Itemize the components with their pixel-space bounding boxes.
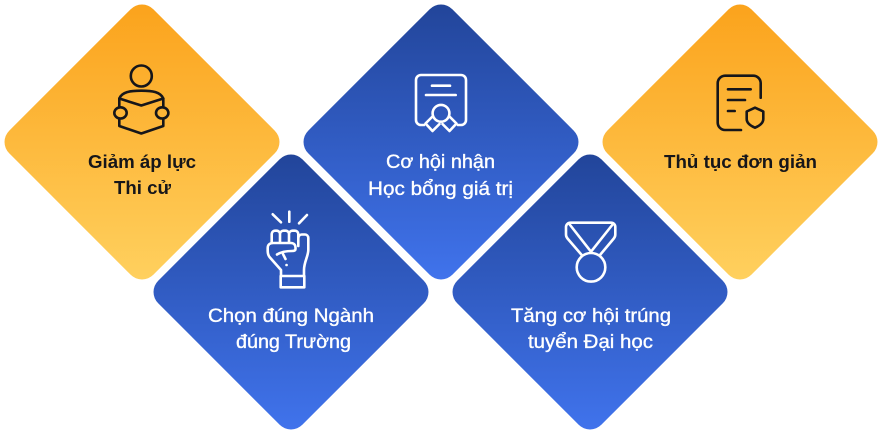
label bbox=[368, 151, 513, 200]
label: Tăng cơ hội trúng bbox=[511, 305, 671, 327]
label: Chọn đúng Ngành bbox=[208, 305, 374, 327]
panel: cơ hội nhận học bổng giá trị bbox=[304, 5, 578, 279]
icon: raised fist bbox=[268, 212, 308, 287]
icon: person reading book bbox=[114, 66, 168, 134]
label: Học bổng giá trị bbox=[368, 178, 513, 200]
icon: document with shield bbox=[718, 76, 763, 130]
diamond: orange bbox=[603, 5, 877, 279]
label bbox=[511, 305, 671, 353]
panel: tăng cơ hội trúng tuyển đại học bbox=[453, 155, 727, 429]
label bbox=[88, 151, 196, 198]
label: Giảm áp lực bbox=[88, 151, 196, 172]
label: Cơ hội nhận bbox=[386, 151, 495, 173]
diamond: orange bbox=[5, 5, 279, 279]
icon: certificate bbox=[416, 75, 466, 131]
label: đúng Trường bbox=[236, 331, 351, 353]
label bbox=[208, 305, 374, 353]
icon: medal bbox=[566, 223, 615, 282]
diamond: blue bbox=[304, 5, 578, 279]
label: Thủ tục đơn giản bbox=[664, 151, 817, 172]
label: Thi cử bbox=[114, 177, 172, 198]
panel: giảm áp lực thi cử bbox=[5, 5, 279, 279]
diamond: blue bbox=[453, 155, 727, 429]
label: tuyển Đại học bbox=[528, 331, 653, 353]
panel: thủ tục đơn giản bbox=[603, 5, 877, 279]
panel: chọn đúng ngành đúng trường bbox=[154, 155, 428, 429]
diamond: blue bbox=[154, 155, 428, 429]
